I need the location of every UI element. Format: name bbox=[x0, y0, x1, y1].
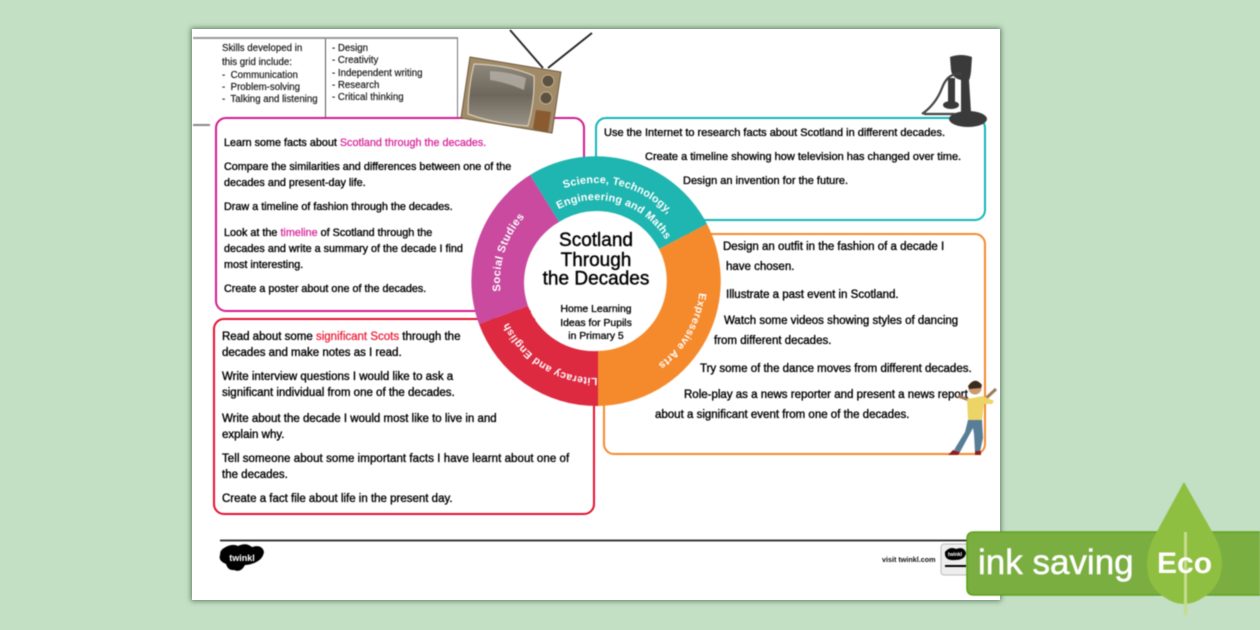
segment: science, technology, engineering and maths: Science, Technology, bbox=[562, 176, 670, 215]
panel: expressive arts: from different decades. bbox=[714, 334, 831, 346]
icon: television bbox=[461, 30, 592, 133]
hub subtitle: Home Learning bbox=[560, 304, 632, 315]
hub title: Through bbox=[561, 250, 631, 271]
skills text: - Communication bbox=[222, 70, 298, 81]
skills text: Skills developed in bbox=[222, 43, 302, 54]
panel: literacy and english: Create a fact file about life in the present day. bbox=[222, 492, 453, 504]
panel: science technology engineering maths bbox=[595, 117, 986, 221]
skills text bbox=[221, 42, 423, 105]
segment: literacy and english: Literacy and English bbox=[503, 322, 598, 386]
hub subtitle bbox=[560, 304, 632, 342]
hub centre disc bbox=[524, 209, 668, 353]
hub title: Scotland bbox=[559, 230, 633, 251]
logo: twinkl small bbox=[941, 544, 969, 575]
panel: social studies: most interesting. bbox=[224, 258, 303, 270]
skills table divider bbox=[325, 39, 326, 117]
panel: science technology engineering maths: Create a timeline showing how television has changed over time. bbox=[645, 150, 961, 162]
footer rule bbox=[220, 540, 968, 542]
panel: social studies bbox=[215, 117, 585, 312]
badge banner bbox=[967, 532, 1260, 595]
panel: social studies: Draw a timeline of fashion through the decades. bbox=[224, 200, 453, 212]
panel: literacy and english: significant individual from one of the decades. bbox=[222, 386, 455, 398]
panel: expressive arts: have chosen. bbox=[726, 260, 794, 272]
skills text: - Critical thinking bbox=[332, 92, 404, 103]
panel: social studies: Learn some facts about Scotland through the decades. bbox=[224, 136, 486, 148]
hub title: the Decades bbox=[543, 268, 649, 290]
panel: expressive arts: Try some of the dance moves from different decades. bbox=[700, 362, 972, 374]
icon: dancing boy bbox=[948, 381, 996, 455]
panel: literacy and english: Read about some significant Scots through the bbox=[222, 330, 460, 342]
left stub rule bbox=[193, 124, 210, 126]
panel: literacy and english: the decades. bbox=[222, 468, 288, 480]
panel: literacy and english bbox=[213, 318, 595, 515]
skills text: this grid include: bbox=[222, 57, 292, 68]
segment: science, technology, engineering and maths bbox=[530, 156, 708, 250]
skills text: - Design bbox=[332, 43, 368, 54]
hub ring bbox=[470, 156, 722, 407]
panel: expressive arts: Illustrate a past event in Scotland. bbox=[726, 288, 899, 300]
segment: social studies bbox=[470, 174, 560, 324]
hub subtitle: Ideas for Pupils bbox=[560, 318, 632, 329]
badge eco label: Eco bbox=[1157, 547, 1212, 580]
skills text: - Talking and listening bbox=[222, 94, 318, 105]
panel: social studies: decades and write a summary of the decade I find bbox=[224, 242, 463, 254]
panel: literacy and english: decades and make notes as I read. bbox=[222, 346, 402, 358]
logo: twinkl small: twinkl bbox=[948, 552, 963, 558]
panel: social studies: Create a poster about one of the decades. bbox=[224, 282, 426, 294]
logo: twinkl bbox=[220, 544, 264, 571]
panel: expressive arts: Design an outfit in the fashion of a decade I bbox=[723, 240, 944, 252]
icon: leaf bbox=[1147, 482, 1222, 615]
hub title bbox=[543, 230, 649, 290]
worksheet page bbox=[192, 29, 1000, 600]
skills text: - Independent writing bbox=[332, 68, 422, 79]
panel: science technology engineering maths: Design an invention for the future. bbox=[683, 174, 848, 186]
eco badge bbox=[967, 482, 1260, 615]
panel: literacy and english: Tell someone about some important facts I have learnt about one of bbox=[222, 452, 569, 464]
panel: expressive arts: about a significant event from one of the decades. bbox=[655, 408, 909, 420]
skills text: - Research bbox=[332, 80, 379, 91]
segment: expressive arts: Expressive Arts bbox=[658, 292, 708, 368]
icon: candlestick telephone bbox=[922, 55, 987, 127]
panel: literacy and english: Write about the decade I would most like to live in and bbox=[222, 412, 497, 424]
panel: expressive arts: Watch some videos showing styles of dancing bbox=[724, 314, 958, 326]
segment: science, technology, engineering and maths: Engineering and Maths bbox=[555, 192, 670, 240]
panel: social studies: Compare the similarities and differences between one of the bbox=[224, 160, 511, 172]
badge label: ink saving bbox=[978, 543, 1134, 582]
panel: literacy and english: explain why. bbox=[222, 428, 284, 440]
panel: social studies: Look at the timeline of Scotland through the bbox=[224, 226, 432, 238]
panel: social studies: decades and present-day life. bbox=[224, 176, 366, 188]
skills text: - Problem-solving bbox=[222, 82, 300, 93]
segment: literacy and english bbox=[478, 306, 599, 407]
segment: social studies: Social Studies bbox=[492, 214, 524, 292]
segment: expressive arts bbox=[597, 224, 722, 407]
panel: expressive arts bbox=[603, 233, 986, 455]
logo: twinkl: twinkl bbox=[229, 553, 255, 563]
panel: science technology engineering maths: Use the Internet to research facts about Scotland in different decades. bbox=[604, 126, 945, 138]
panel: expressive arts: Role-play as a news reporter and present a news report bbox=[684, 388, 968, 400]
panel: literacy and english: Write interview questions I would like to ask a bbox=[222, 370, 453, 382]
skills text: - Creativity bbox=[332, 55, 378, 66]
hub subtitle: in Primary 5 bbox=[568, 331, 624, 342]
footer url: visit twinkl.com bbox=[882, 555, 936, 564]
skills table bbox=[193, 37, 458, 117]
